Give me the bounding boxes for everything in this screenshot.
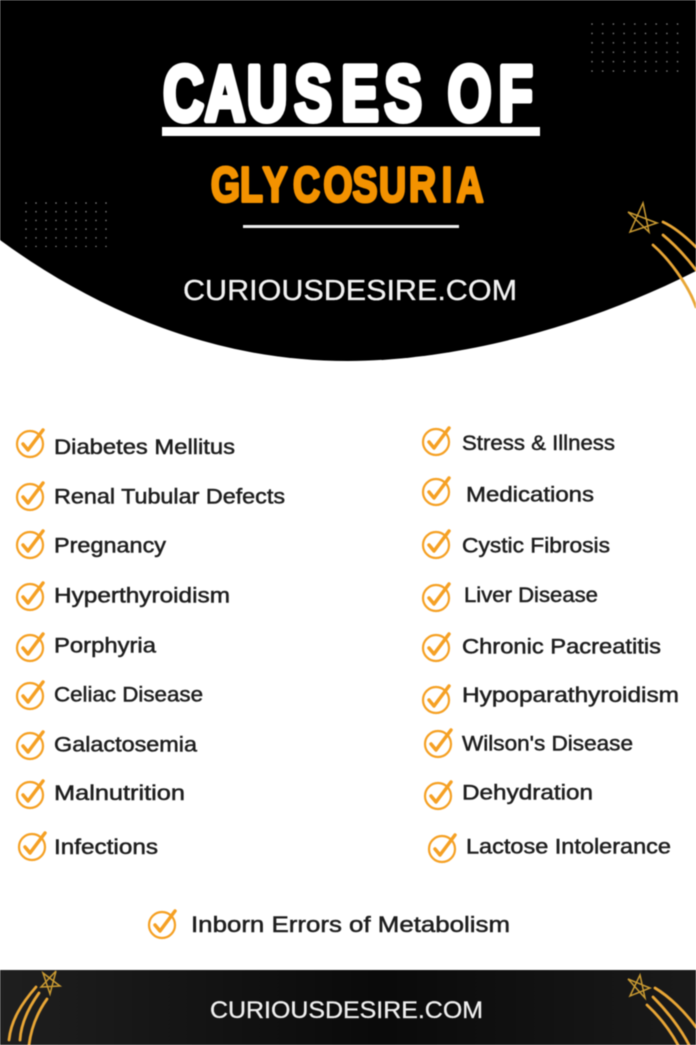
item: Liver Disease: [423, 584, 598, 611]
item: Porphyria: Porphyria: [54, 634, 156, 658]
item: Celiac Disease: [17, 682, 203, 709]
item: Cystic Fibrosis: Cystic Fibrosis: [462, 534, 610, 558]
item: Infections: [19, 833, 158, 860]
item: Galactosemia: Galactosemia: [54, 734, 197, 756]
item: Cystic Fibrosis: [423, 531, 610, 558]
subtitle: glycosuria: GLYCOSURIA: [211, 158, 484, 213]
item: Pregnancy: [17, 531, 167, 558]
item: Chronic Pacreatitis: Chronic Pacreatitis: [462, 636, 661, 658]
item: Stress & Illness: [423, 428, 615, 455]
icon: shooting star footer left: [9, 971, 60, 1045]
item: Hypoparathyroidism: [423, 684, 679, 713]
footer website label: CURIOUSDESIRE.COM: [210, 997, 483, 1024]
list: left column: [17, 430, 285, 860]
item: Hypoparathyroidism: Hypoparathyroidism: [462, 684, 679, 707]
header background shape: [0, 0, 696, 361]
website label: CURIOUSDESIRE.COM: [183, 275, 517, 307]
item: Lactose Intolerance: [429, 835, 671, 862]
dot pattern: top right: [591, 23, 679, 72]
item: Liver Disease: Liver Disease: [464, 584, 598, 607]
footer band: [0, 970, 696, 1045]
subtitle rule: [243, 225, 459, 228]
title: causes of: CAUSES OF: [163, 50, 533, 137]
item: Lactose Intolerance: Lactose Intolerance: [466, 836, 671, 858]
item: Medications: [423, 478, 594, 506]
list: right column: [423, 428, 679, 862]
item: Diabetes Mellitus: [17, 430, 235, 459]
item: Celiac Disease: Celiac Disease: [54, 684, 203, 706]
icon: shooting star top right: [628, 203, 696, 307]
item: Inborn Errors of Metabolism: [149, 911, 510, 938]
item: Pregnancy: Pregnancy: [54, 534, 167, 558]
item: Dehydration: [425, 782, 593, 809]
item: Stress & Illness: Stress & Illness: [462, 432, 615, 455]
item: Inborn Errors of Metabolism: Inborn Errors of Metabolism: [191, 912, 510, 937]
item: Galactosemia: [17, 732, 197, 759]
icon: shooting star footer right: [628, 975, 696, 1045]
item: Renal Tubular Defects: [17, 483, 285, 510]
item: Dehydration: Dehydration: [462, 782, 593, 804]
item: Medications: Medications: [466, 484, 594, 506]
item: Wilson's Disease: [425, 730, 633, 757]
item: Hyperthyroidism: Hyperthyroidism: [54, 584, 230, 608]
item: Chronic Pacreatitis: [423, 634, 661, 661]
item: Malnutrition: [17, 781, 185, 808]
item: Diabetes Mellitus: Diabetes Mellitus: [54, 436, 235, 459]
item: Renal Tubular Defects: Renal Tubular Defects: [54, 486, 285, 508]
title underline: [162, 127, 540, 136]
dot pattern: left: [25, 202, 108, 247]
item: Wilson's Disease: Wilson's Disease: [462, 732, 633, 756]
item: Porphyria: [17, 634, 156, 661]
item: Hyperthyroidism: [17, 583, 230, 610]
item: Infections: Infections: [54, 836, 158, 859]
item: Malnutrition: Malnutrition: [54, 782, 185, 805]
